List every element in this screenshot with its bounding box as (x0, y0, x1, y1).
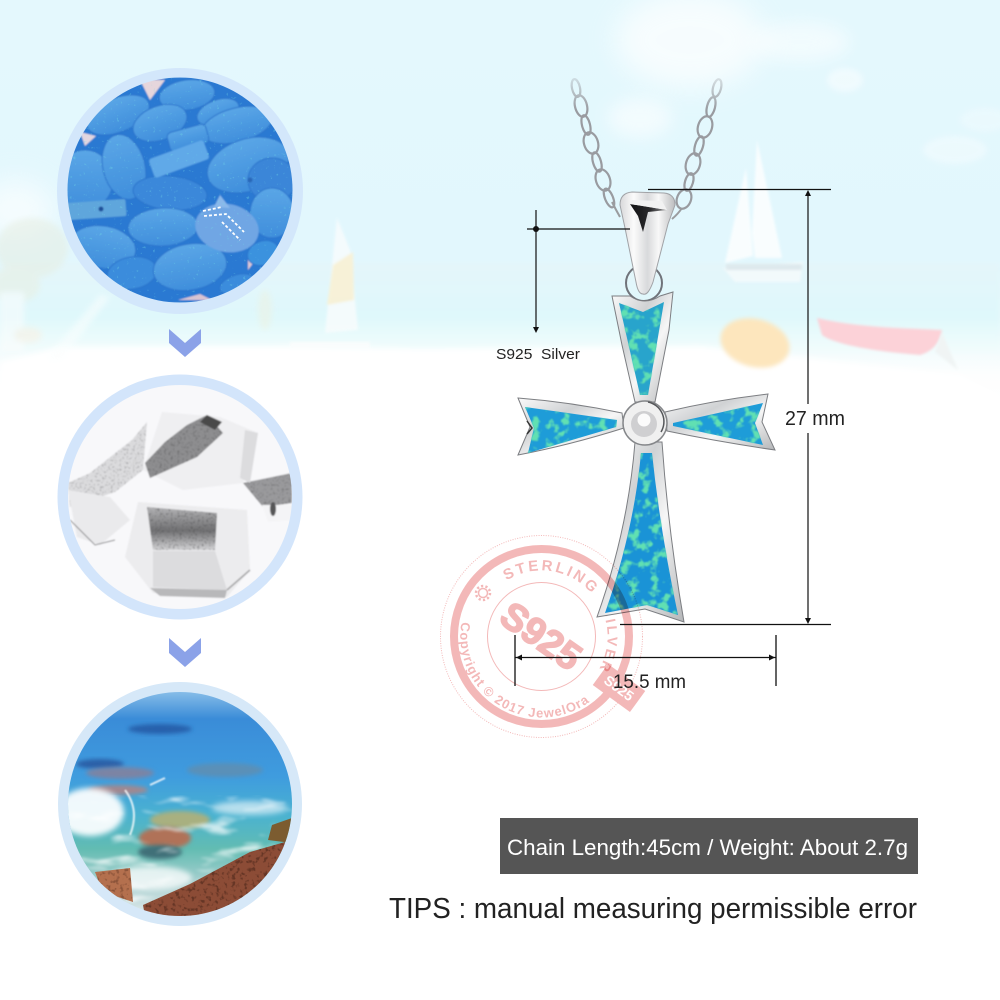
right sailboat (723, 140, 803, 282)
bar beads (148, 140, 210, 178)
jump ring (626, 265, 662, 301)
stamp tag (593, 664, 645, 712)
label: 27 mm: 27 mm (785, 408, 845, 430)
ocean photo (56, 692, 293, 916)
ring (58, 374, 302, 620)
left arm (518, 398, 624, 455)
ring (58, 682, 302, 926)
dolphin bead (194, 203, 260, 254)
red boat (817, 318, 942, 355)
label: S925 Silver: S925 Silver (496, 346, 580, 363)
bottom arm (597, 442, 684, 622)
chain length and weight banner (500, 818, 918, 874)
outer dotted ring (440, 536, 642, 738)
dimension: S925 silver pointer (527, 210, 630, 333)
stamp curved text: STERLING (503, 560, 597, 592)
left sailboat (290, 218, 370, 349)
rocks (143, 842, 285, 916)
cross pendant (518, 192, 775, 622)
sea band (0, 263, 1000, 353)
circle 2: silver nuggets (58, 374, 302, 620)
stamp copyright text: Copyright © 2017 JewelOra (458, 622, 590, 718)
right chain (674, 78, 723, 211)
stamp gear (476, 586, 490, 600)
silver photo (67, 384, 293, 610)
stamp SILVER lettering behind the cross: SILVER (600, 616, 618, 672)
chain length and weight banner: Chain Length:45cm / Weight: About 2.7g (507, 835, 908, 860)
arrow: chevron down 1 (169, 329, 201, 357)
inner ring (488, 582, 596, 690)
dimension: 15.5 mm width (515, 635, 776, 686)
right arm (665, 394, 775, 450)
yellow kayak (715, 311, 795, 375)
bail (620, 192, 675, 294)
left chain (570, 78, 616, 209)
top arm (612, 292, 673, 402)
label: 15.5 mm: 15.5 mm (613, 671, 686, 693)
left palm and hut (0, 218, 272, 360)
thick ring (454, 549, 629, 724)
tips note: TIPS : manual measuring permissible error (389, 893, 917, 925)
ring (57, 68, 303, 314)
opal photo (57, 76, 296, 303)
sand (0, 346, 1000, 430)
dimension: 27 mm height (620, 190, 831, 624)
centre setting (623, 401, 667, 445)
necklace chains (570, 78, 723, 219)
S925 sterling silver stamp (440, 535, 646, 738)
clouds (0, 0, 1000, 240)
circle 1: raw blue opal beads (57, 68, 303, 314)
stamp tag: S925 (601, 672, 637, 704)
circle 3: ocean (56, 682, 302, 926)
arrow: chevron down 2 (169, 638, 201, 667)
stamp S925: S925 (492, 594, 589, 679)
